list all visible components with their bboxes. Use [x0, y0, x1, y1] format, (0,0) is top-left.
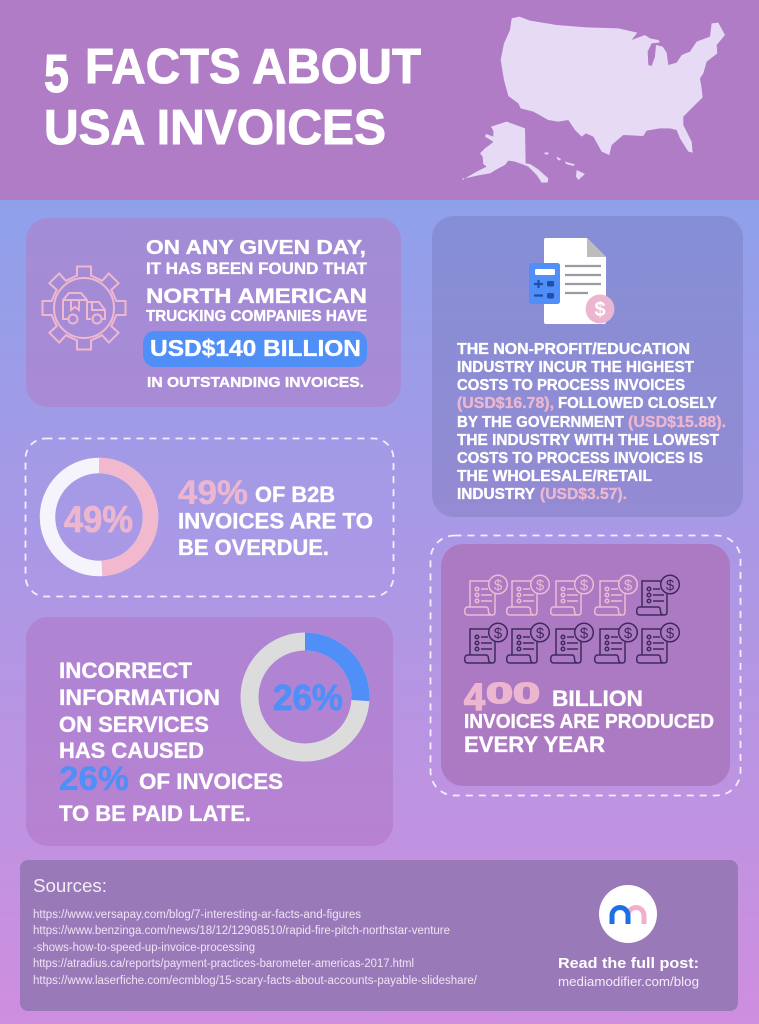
chart: 49% donut: 49% [64, 499, 133, 540]
icons: receipts pictogram: $ [580, 577, 589, 594]
icons: receipts pictogram: $ [624, 577, 633, 594]
text: processing costs: INDUSTRY INCUR THE HIGHEST [457, 359, 695, 376]
text: trucking fact: TRUCKING COMPANIES HAVE [146, 308, 367, 325]
text: processing costs: THE INDUSTRY WITH THE LOWEST [457, 432, 720, 449]
panel: 26% paid late [26, 617, 393, 846]
icon: mediamodifier logo [599, 885, 657, 943]
text: processing costs: FOLLOWED CLOSELY [558, 395, 718, 412]
text: 49% of B2B invoices: OF B2B [255, 482, 335, 507]
icon: USA map [462, 17, 725, 183]
text: incorrect information: INFORMATION [59, 685, 220, 710]
text: source links: https://www.versapay.com/blog/7-interesting-ar-facts-and-figures [33, 909, 361, 921]
icons: receipts pictogram: $ [536, 577, 545, 594]
panel: sources [20, 860, 738, 1011]
text: incorrect information: INCORRECT [59, 658, 193, 683]
text: processing costs: (USD$15.88). [628, 414, 726, 431]
text: processing costs: COSTS TO PROCESS INVOICES IS [457, 450, 703, 467]
text: 49% of B2B invoices: 49% [178, 474, 248, 512]
text: read the full post: Read the full post: [558, 955, 699, 972]
text: incorrect information: ON SERVICES [59, 712, 209, 737]
text: processing costs: COSTS TO PROCESS INVOICES [457, 377, 685, 394]
title: FACTS ABOUT [85, 40, 421, 94]
panel: 49% overdue [26, 438, 394, 596]
chart: 26% donut [250, 642, 360, 752]
text: incorrect information: 26% [59, 760, 129, 798]
icons: receipts pictogram: $ [494, 577, 503, 594]
text: 49% of B2B invoices [178, 474, 373, 560]
text: processing costs: (USD$16.78), [457, 395, 554, 412]
text: 400 billion: INVOICES ARE PRODUCED [464, 711, 714, 733]
text: processing costs: BY THE GOVERNMENT [457, 414, 625, 431]
callout: USD$140 billion [143, 331, 367, 367]
chart: 26% donut: 26% [273, 677, 343, 718]
header band [0, 0, 759, 200]
icons: receipts pictogram: $ [666, 577, 675, 594]
icons: receipts pictogram: $ [666, 625, 675, 642]
heading: sources: Sources: [33, 876, 107, 896]
panel: trucking [26, 218, 401, 407]
panel: processing costs [432, 216, 743, 517]
icon: gear with truck [42, 266, 126, 350]
title: 5 [44, 44, 69, 104]
icons: receipts pictogram [465, 575, 679, 663]
text: incorrect information [59, 658, 283, 826]
icons: receipts pictogram: $ [494, 625, 503, 642]
text: trucking fact: IN OUTSTANDING INVOICES. [147, 374, 364, 391]
text: source links: https://www.benzinga.com/news/18/12/12908510/rapid-fire-pitch-northstar-venture [33, 925, 450, 937]
text: processing costs: THE WHOLESALE/RETAIL [457, 468, 652, 485]
icon: invoice with calculator [529, 238, 614, 324]
text: processing costs [457, 341, 726, 503]
text: read the full post [558, 955, 699, 989]
text: trucking fact: NORTH AMERICAN [146, 284, 367, 308]
text: trucking fact: ON ANY GIVEN DAY, [146, 236, 366, 259]
text: read the full post: mediamodifier.com/blog [558, 974, 699, 989]
text: processing costs: INDUSTRY [457, 486, 536, 503]
text: 400 billion: BILLION [552, 686, 643, 711]
text: 49% of B2B invoices: INVOICES ARE TO [178, 508, 373, 534]
icons: receipts pictogram: $ [536, 625, 545, 642]
icon: invoice with calculator: $ [594, 299, 606, 321]
text: source links: https://www.laserfiche.com/ecmblog/15-scary-facts-about-accounts-payable-slideshare/ [33, 975, 478, 987]
icons: receipts pictogram: $ [580, 625, 589, 642]
text: incorrect information: TO BE PAID LATE. [59, 801, 251, 826]
text: source links [33, 909, 478, 987]
icons: receipts pictogram: $ [624, 625, 633, 642]
text: incorrect information: OF INVOICES [139, 769, 283, 794]
text: trucking fact [143, 236, 367, 391]
text: 400 billion [464, 677, 714, 757]
panel: 400 billion invoices [430, 536, 740, 796]
text: 49% of B2B invoices: BE OVERDUE. [178, 535, 329, 560]
text: 400 billion: 00 [486, 678, 540, 710]
title [44, 40, 421, 155]
text: source links: https://atradius.ca/reports/payment-practices-barometer-americas-2017.html [33, 958, 414, 970]
text: source links: -shows-how-to-speed-up-invoice-processing [33, 942, 255, 954]
callout: USD$140 billion: USD$140 BILLION [150, 335, 361, 361]
text: 400 billion: EVERY YEAR [464, 732, 605, 757]
text: trucking fact: IT HAS BEEN FOUND THAT [146, 260, 367, 278]
text: incorrect information: HAS CAUSED [59, 738, 204, 763]
title: USA INVOICES [44, 101, 386, 155]
text: processing costs: THE NON-PROFIT/EDUCATION [457, 341, 690, 358]
text: processing costs: (USD$3.57). [540, 486, 627, 503]
text: 400 billion: 4 [464, 677, 485, 719]
chart: 49% donut [48, 466, 150, 568]
